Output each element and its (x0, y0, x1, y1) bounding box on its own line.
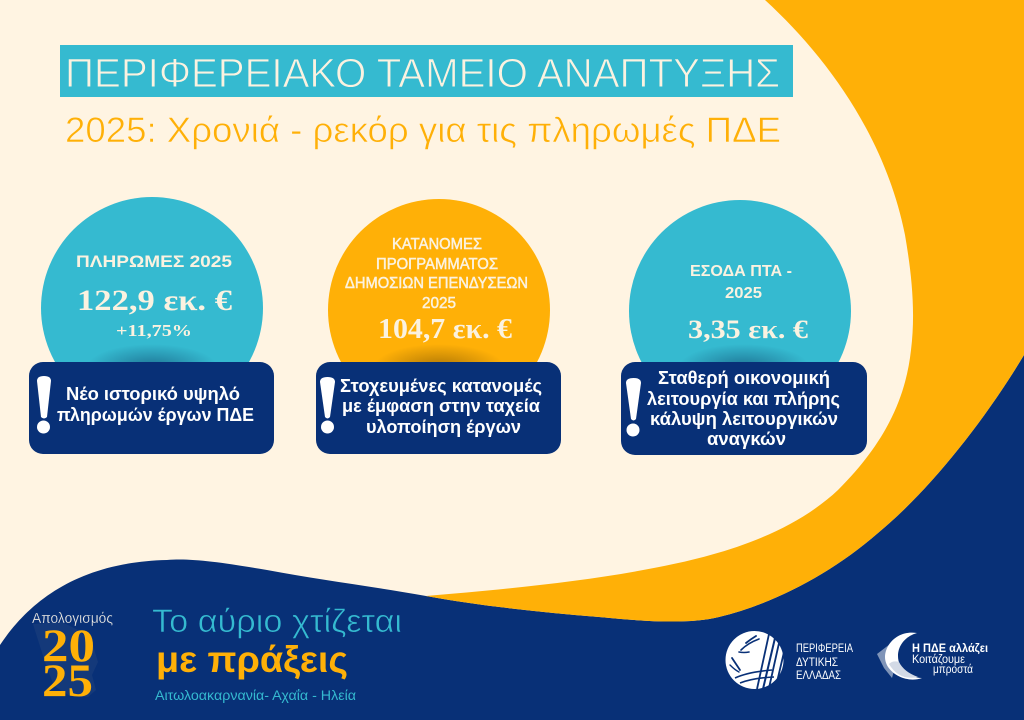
circle shadow (678, 344, 810, 392)
subtitle: 2025: Χρονιά - ρεκόρ για τις πληρωμές ΠΔΕ (65, 111, 781, 150)
callout text: revenue (647, 368, 840, 449)
slogan text (912, 643, 988, 676)
logo text: ΕΛΛΑΔΑΣ (796, 670, 841, 682)
panel: payments 2025 (29, 197, 274, 454)
regions line: Αιτωλοακαρνανία- Αχαΐα - Ηλεία (155, 688, 356, 703)
callout text: allocations: Στοχευμένες κατανομές (340, 376, 542, 396)
icon: exclamation mark (320, 377, 335, 434)
callout text: allocations (340, 376, 542, 437)
panel: investment programme allocations (316, 199, 561, 454)
callout box: payments (29, 362, 274, 454)
circle: revenue (629, 200, 851, 422)
heading: allocations: ΠΡΟΓΡΑΜΜΑΤΟΣ (376, 256, 498, 273)
map silhouette (33, 622, 98, 697)
callout box: revenue (621, 362, 867, 455)
callout text: revenue: κάλυψη λειτουργικών (650, 409, 838, 429)
heading: allocations: ΔΗΜΟΣΙΩΝ ΕΠΕΝΔΥΣΕΩΝ (345, 275, 528, 292)
value: 104,7: 104,7 εκ. € (378, 314, 512, 345)
logo text (796, 643, 853, 682)
title banner (60, 45, 793, 97)
circle: payments (41, 197, 263, 419)
change: +11,75%: +11,75% (116, 321, 192, 340)
icon: exclamation mark (626, 378, 641, 436)
title: ΠΕΡΙΦΕΡΕΙΑΚΟ ΤΑΜΕΙΟ ΑΝΑΠΤΥΞΗΣ (65, 50, 780, 96)
callout box: allocations (316, 362, 561, 454)
heading: allocations: ΚΑΤΑΝΟΜΕΣ (392, 236, 482, 253)
slogan line 1: Το αύριο χτίζεται (152, 603, 402, 639)
value: 122,9: 122,9 εκ. € (77, 284, 232, 317)
callout text: payments: πληρωμών έργων ΠΔΕ (57, 405, 254, 425)
logo text: ΔΥΤΙΚΗΣ (796, 657, 838, 669)
callout text: revenue: αναγκών (707, 429, 786, 449)
value: 3,35: 3,35 εκ. € (688, 315, 808, 344)
heading: allocations (345, 236, 528, 312)
circle shadow (86, 344, 218, 392)
slogan (152, 603, 402, 703)
heading: allocations: 2025 (422, 295, 456, 312)
icon: exclamation mark (37, 376, 51, 434)
heading: revenue: ΕΣΟΔΑ ΠΤΑ - (690, 263, 792, 280)
slogan text: Κοιτάζουμε (912, 654, 965, 666)
navy wave (0, 355, 1024, 720)
logo: Η ΠΔΕ αλλάζει (877, 633, 988, 680)
circle shadow (373, 344, 505, 392)
callout text: allocations: υλοποίηση έργων (366, 417, 521, 437)
logo text: ΠΕΡΙΦΕΡΕΙΑ (796, 643, 853, 655)
logo emblem (726, 631, 784, 689)
heading: revenue (690, 263, 792, 302)
callout text: allocations: με έμφαση στην ταχεία (342, 396, 540, 416)
panel: PTA revenue (621, 200, 867, 455)
orange wave (426, 0, 1024, 622)
logo: Περιφέρεια Δυτικής Ελλάδας (726, 631, 853, 689)
slogan text: Η ΠΔΕ αλλάζει (912, 643, 988, 655)
label: Απολογισμός: Απολογισμός (32, 611, 113, 627)
year: 25: 25 (42, 655, 93, 707)
heading: revenue: 2025 (725, 285, 762, 302)
crescent emblem (877, 633, 922, 680)
year: 20: 20 (42, 620, 95, 672)
callout text: revenue: Σταθερή οικονομική (658, 368, 830, 388)
callout text: payments (57, 384, 254, 425)
slogan text: μπροστά (933, 664, 973, 676)
heading: payments: ΠΛΗΡΩΜΕΣ 2025 (76, 252, 232, 271)
circle: allocations (328, 199, 550, 421)
slogan line 2: με πράξεις (156, 639, 348, 680)
callout text: revenue: λειτουργία και πλήρης (647, 389, 840, 409)
callout text: payments: Νέο ιστορικό υψηλό (66, 384, 240, 404)
badge: Απολογισμός 2025 (32, 611, 113, 707)
